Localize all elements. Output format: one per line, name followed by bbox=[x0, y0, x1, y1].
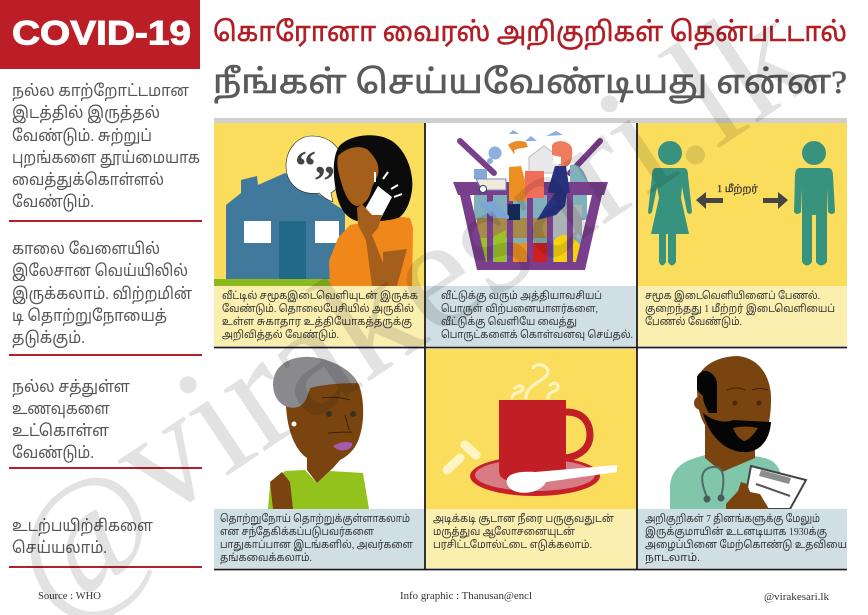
caption: delivery bbox=[426, 286, 636, 346]
tip: nutritious food: உட்கொள்ள bbox=[12, 422, 109, 440]
caption: social distance: குறைந்தது 1 மீற்றர் இடைவெளியைப் bbox=[645, 303, 835, 316]
icon: woman on phone bbox=[329, 135, 413, 286]
caption: hot water: அடிக்கடி சூடான நீரை பருகுவதுடன் bbox=[433, 512, 614, 526]
panel: covid-19 banner: COVID-19 bbox=[12, 14, 191, 52]
arrow: right bbox=[763, 192, 788, 209]
caption: social distance bbox=[638, 286, 847, 346]
caption: doctor: அறிகுறிகள் 7 தினங்களுக்கு மேலும் bbox=[645, 512, 820, 526]
icon: female figure bbox=[648, 141, 692, 266]
caption: hot water: மருத்துவ ஆலோசனையுடன் bbox=[433, 525, 575, 538]
caption: delivery: பொருட்களைக் கொள்வனவு செய்தல். bbox=[441, 328, 633, 341]
caption: vulnerable: என சந்தேகிக்கப்படுபவர்களை bbox=[220, 525, 375, 539]
caption: delivery: வீட்டுக்கு வெளியே வைத்து bbox=[441, 315, 577, 328]
caption: delivery: வீட்டுக்கு வரும் அத்தியாவசியப் bbox=[441, 289, 602, 302]
icon: speech bubble bbox=[286, 136, 343, 205]
tip: fresh air: புறங்களை தூய்மையாக bbox=[12, 150, 200, 169]
caption: social distance: சமூக இடைவெளியினைப் பேணல். bbox=[645, 289, 820, 302]
panel: covid-19 banner bbox=[0, 0, 200, 69]
title: red heading: கொரோனா வைரஸ் அறிகுறிகள் தென்பட்டால் bbox=[213, 17, 847, 50]
tip: sunlight: தடுக்கும். bbox=[12, 329, 85, 349]
arrow: left bbox=[696, 192, 723, 209]
caption: stay home: வேண்டும். தொலைபேசியில் அருகில் bbox=[222, 302, 414, 315]
icon: house bbox=[226, 173, 345, 279]
tip: nutritious food bbox=[12, 378, 130, 464]
tip: sunlight bbox=[12, 240, 192, 349]
footer: credit: Info graphic : Thanusan@encl bbox=[400, 590, 532, 602]
caption: vulnerable: பாதுகாப்பான இடங்களில், அவர்களை bbox=[220, 538, 414, 551]
icon: speech bubble: “ bbox=[295, 144, 316, 190]
label: one metre: 1 மீற்றர் bbox=[717, 183, 759, 195]
panel: isolate the vulnerable bbox=[214, 349, 424, 509]
icon: basket with delivery people bbox=[453, 130, 608, 270]
icon: speech bubble: ” bbox=[314, 159, 335, 205]
panel: stay home and call bbox=[214, 123, 424, 286]
grey band above grid bbox=[214, 118, 847, 123]
caption: stay home: வீட்டில் சமூகஇடைவெளியுடன் இருக்க bbox=[222, 289, 418, 302]
icon: red cup with steam bbox=[447, 365, 617, 496]
caption: vulnerable: தங்கவைக்கலாம். bbox=[220, 551, 312, 564]
tip: exercise bbox=[12, 518, 153, 557]
caption: stay home: அறிவித்தல் வேண்டும். bbox=[222, 328, 339, 342]
caption: vulnerable bbox=[214, 509, 424, 568]
footer: source: Source : WHO bbox=[38, 590, 101, 602]
tip: nutritious food: நல்ல சத்துள்ள bbox=[12, 378, 130, 398]
caption: doctor: அழைப்பினை மேற்கொண்டு உதவியை bbox=[645, 538, 847, 552]
panel: hot water bbox=[426, 349, 636, 509]
icon: male figure bbox=[794, 141, 835, 266]
caption: doctor bbox=[638, 509, 847, 568]
footer: handle: @virakesari.lk bbox=[764, 591, 829, 603]
grid lines bbox=[214, 123, 847, 570]
caption: social distance: பேணல் வேண்டும். bbox=[645, 315, 742, 328]
caption: doctor: இருக்குமாயின் உடனடியாக 1930க்கு bbox=[645, 525, 827, 538]
caption: delivery: பொருள் விற்பனையாளர்களை, bbox=[441, 302, 598, 316]
tip: sunlight: டி தொற்றுநோயைத் bbox=[12, 307, 167, 327]
caption: hot water: பரசிட்டமோல்ட்டை எடுக்கலாம். bbox=[433, 538, 592, 551]
tip: fresh air: வேண்டும். bbox=[12, 193, 94, 213]
tip: sunlight: இலேசான வெய்யிலில் bbox=[12, 262, 188, 282]
tip: fresh air: வேண்டும். சுற்றுப் bbox=[12, 127, 152, 147]
tip: fresh air: வைத்துக்கொள்ளல் bbox=[12, 171, 164, 191]
tip: fresh air: இடத்தில் இருத்தல் bbox=[12, 104, 160, 124]
panel: call doctor bbox=[638, 349, 847, 509]
tip: sunlight: இருக்கலாம். விற்றமின் bbox=[12, 285, 192, 305]
panel: left column tips bbox=[9, 82, 202, 568]
icon: elderly woman bbox=[268, 357, 369, 509]
icon: doctor bbox=[670, 356, 806, 509]
tip: exercise: செய்யலாம். bbox=[12, 539, 107, 557]
panel: social distance bbox=[638, 123, 847, 286]
tip: nutritious food: உணவுகளை bbox=[12, 401, 110, 419]
tip: exercise: உடற்பயிற்சிகளை bbox=[12, 518, 153, 536]
title: grey heading: நீங்கள் செய்யவேண்டியது என்ன? bbox=[213, 64, 847, 104]
panel: basket delivery bbox=[426, 123, 636, 286]
tip: nutritious food: வேண்டும். bbox=[12, 444, 94, 464]
caption: vulnerable: தொற்றுநோய் தொற்றுக்குள்ளாகலாம் bbox=[220, 512, 410, 526]
tip: sunlight: காலை வேளையில் bbox=[12, 240, 160, 258]
caption: stay home: உள்ள சுகாதார உத்தியோகத்தருக்கு bbox=[222, 315, 412, 328]
caption: doctor: நாடலாம். bbox=[645, 552, 700, 565]
tip: fresh air: நல்ல காற்றோட்டமான bbox=[12, 82, 189, 101]
caption: hot water bbox=[426, 509, 636, 568]
caption: stay home bbox=[214, 286, 424, 346]
tip: fresh air bbox=[12, 82, 200, 213]
